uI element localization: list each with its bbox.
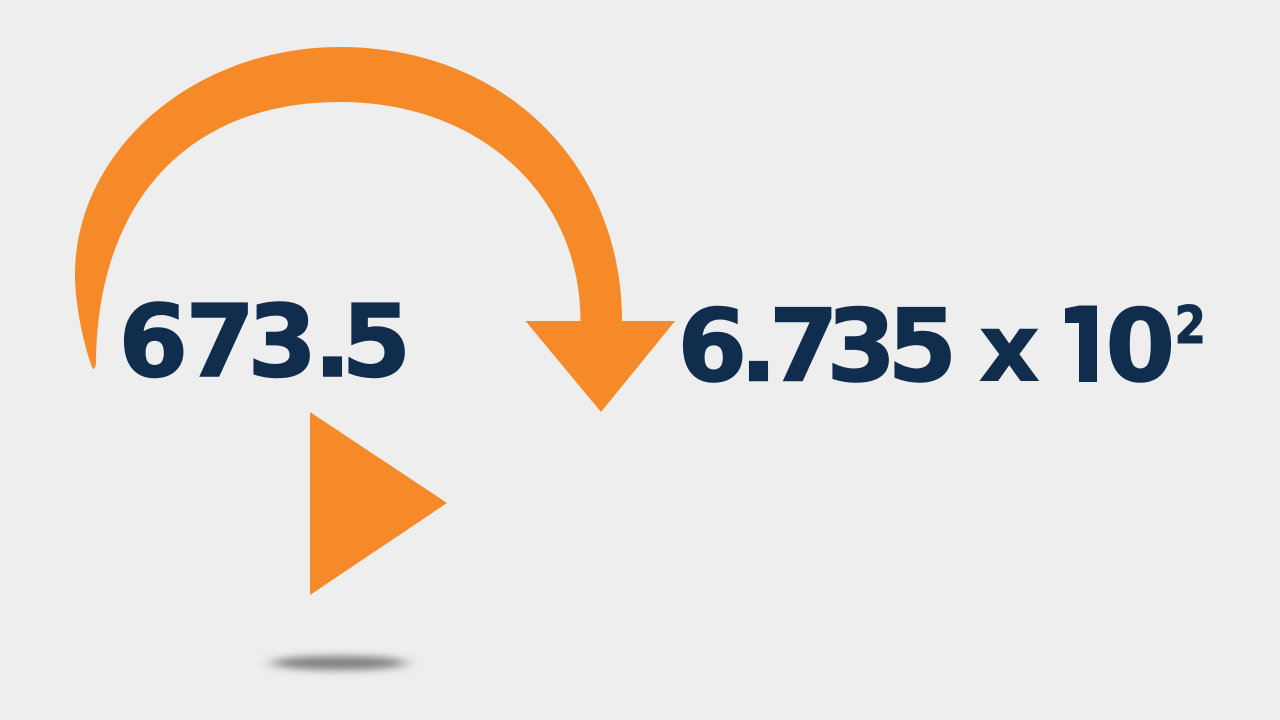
scientific notation: 1 <box>1051 287 1121 405</box>
play button shadow <box>271 656 407 670</box>
scientific notation <box>682 304 1202 383</box>
scientific notation: 0 <box>1106 288 1175 404</box>
play button triangle <box>310 412 447 595</box>
source number: 673.5 <box>118 283 411 400</box>
curved arrow <box>75 47 675 412</box>
infographic canvas <box>75 47 1202 676</box>
scientific notation: 6.735 <box>678 288 957 404</box>
scientific notation: x <box>979 294 1040 404</box>
scientific notation: 2 <box>1174 296 1206 356</box>
